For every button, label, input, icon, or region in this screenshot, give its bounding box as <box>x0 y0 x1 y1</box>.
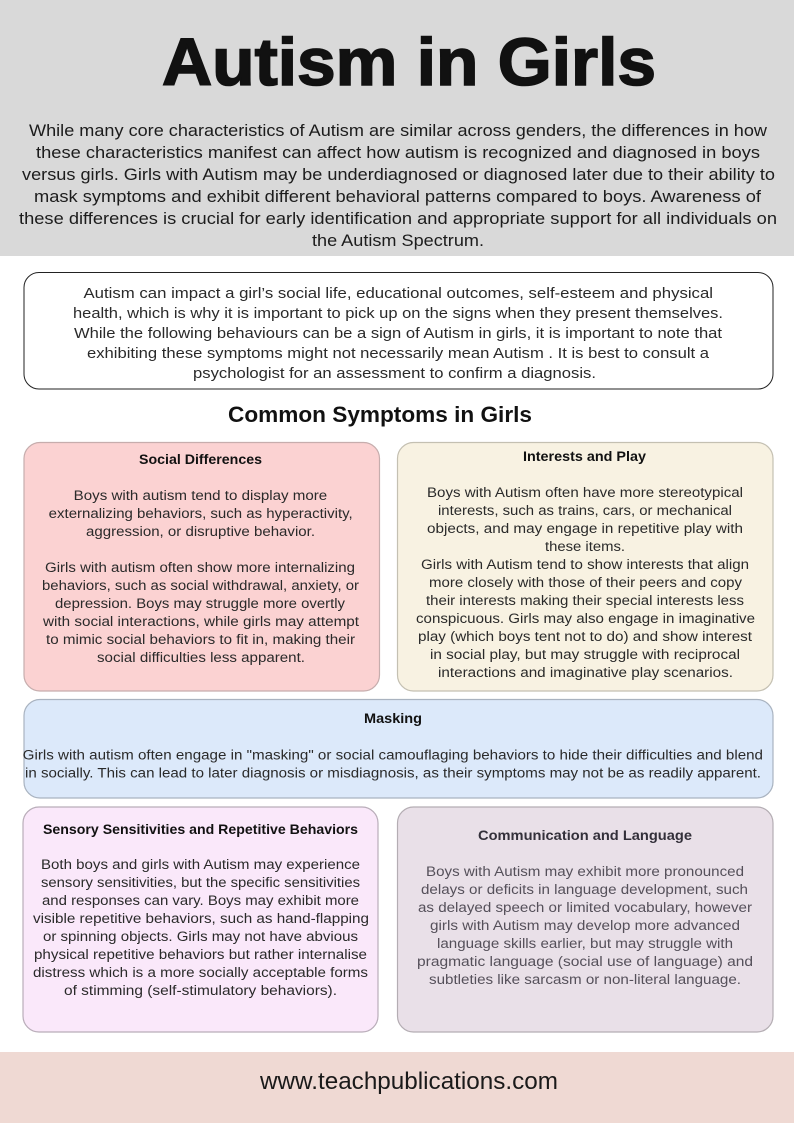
header paragraph: versus girls. Girls with Autism may be underdiagnosed or diagnosed later due to their ability to <box>22 165 775 184</box>
social differences text: aggression, or disruptive behavior. <box>86 524 315 540</box>
interests and play text: play (which boys tent not to do) and show interest <box>418 629 752 645</box>
social differences text: with social interactions, while girls may attempt <box>42 614 359 630</box>
panel: communication and language <box>398 807 773 1032</box>
interests and play text: more closely with those of their peers and copy <box>429 575 743 591</box>
communication and language text <box>417 864 753 988</box>
social differences text <box>42 488 359 666</box>
intro text: While the following behaviours can be a sign of Autism in girls, it is important to note that <box>74 325 723 342</box>
header paragraph: While many core characteristics of Autism are similar across genders, the differences in how <box>29 121 768 140</box>
header paragraph <box>19 121 777 250</box>
social differences text: depression. Boys may struggle more overtly <box>55 596 346 612</box>
interests and play text: Girls with Autism tend to show interests that align <box>421 557 749 573</box>
interests and play text: objects, and may engage in repetitive play with <box>427 521 743 537</box>
sensory sensitivities text: physical repetitive behaviors but rather internalise <box>34 947 367 963</box>
social differences text: Boys with autism tend to display more <box>74 488 327 504</box>
header paragraph: the Autism Spectrum. <box>312 231 484 250</box>
masking text: in socially. This can lead to later diagnosis or misdiagnosis, as their symptoms may not be as readily apparent. <box>25 766 761 782</box>
social differences text: externalizing behaviors, such as hyperactivity, <box>49 506 353 522</box>
communication and language text: as delayed speech or limited vocabulary, however <box>418 900 752 916</box>
communication and language text: delays or deficits in language development, such <box>421 882 748 898</box>
panel: header <box>0 0 794 256</box>
communication and language text: language skills earlier, but may struggle with <box>437 936 733 952</box>
sensory sensitivities text: sensory sensitivities, but the specific sensitivities <box>41 875 360 891</box>
communication and language text: pragmatic language (social use of language) and <box>417 954 753 970</box>
title: Autism in Girls <box>162 25 656 100</box>
heading: common symptoms: Common Symptoms in Girls <box>228 402 532 427</box>
intro text: psychologist for an assessment to confirm a diagnosis. <box>193 365 596 382</box>
interests and play text: these items. <box>545 539 625 555</box>
interests and play text <box>416 485 755 681</box>
interests and play text: interactions and imaginative play scenarios. <box>438 665 733 681</box>
intro text: health, which is why it is important to pick up on the signs when they present themselves. <box>73 305 723 322</box>
panel: sensory sensitivities <box>23 807 378 1032</box>
header paragraph: these differences is crucial for early identification and appropriate support for all individuals on <box>19 209 777 228</box>
social differences text: social difficulties less apparent. <box>97 650 305 666</box>
masking text: Girls with autism often engage in "masking" or social camouflaging behaviors to hide their difficulties and blend <box>23 748 763 764</box>
sensory sensitivities text: distress which is a more socially acceptable forms <box>33 965 368 981</box>
masking text <box>23 748 763 782</box>
interests and play text: Boys with Autism often have more stereotypical <box>427 485 743 501</box>
social differences text: to mimic social behaviors to fit in, making their <box>46 632 355 648</box>
header paragraph: mask symptoms and exhibit different behavioral patterns compared to boys. Awareness of <box>34 187 761 206</box>
communication and language text: subtleties like sarcasm or non-literal language. <box>429 972 741 988</box>
sensory sensitivities text <box>33 857 369 999</box>
sensory sensitivities text: or spinning objects. Girls may not have abvious <box>43 929 358 945</box>
panel: interests and play <box>398 442 773 691</box>
heading: sensory sensitivities: Sensory Sensitivities and Repetitive Behaviors <box>43 821 358 837</box>
panel: footer <box>0 1052 794 1123</box>
footer url: www.teachpublications.com <box>259 1068 558 1095</box>
sensory sensitivities text: visible repetitive behaviors, such as hand-flapping <box>33 911 369 927</box>
interests and play text: interests, such as trains, cars, or mechanical <box>438 503 732 519</box>
sensory sensitivities text: and responses can vary. Boys may exhibit more <box>42 893 359 909</box>
sensory sensitivities text: of stimming (self-stimulatory behaviors). <box>64 983 337 999</box>
interests and play text: their interests making their special interests less <box>426 593 744 609</box>
heading: masking: Masking <box>364 710 422 726</box>
interests and play text: in social play, but may struggle with reciprocal <box>430 647 740 663</box>
communication and language text: girls with Autism may develop more advanced <box>430 918 740 934</box>
intro text: Autism can impact a girl’s social life, educational outcomes, self-esteem and physical <box>84 285 713 302</box>
intro text: exhibiting these symptoms might not necessarily mean Autism . It is best to consult a <box>87 345 710 362</box>
social differences text: Girls with autism often show more internalizing <box>45 560 355 576</box>
heading: social differences: Social Differences <box>139 451 262 467</box>
panel: masking <box>23 700 773 798</box>
intro text <box>73 285 723 382</box>
communication and language text: Boys with Autism may exhibit more pronounced <box>426 864 744 880</box>
interests and play text: conspicuous. Girls may also engage in imaginative <box>416 611 755 627</box>
heading: communication and language: Communication and Language <box>478 827 692 843</box>
header paragraph: these characteristics manifest can affect how autism is recognized and diagnosed in boys <box>36 143 760 162</box>
sensory sensitivities text: Both boys and girls with Autism may experience <box>41 857 360 873</box>
heading: interests and play: Interests and Play <box>523 448 646 464</box>
social differences text: behaviors, such as social withdrawal, anxiety, or <box>42 578 359 594</box>
panel: social differences <box>24 442 380 691</box>
panel: intro callout <box>24 272 773 389</box>
